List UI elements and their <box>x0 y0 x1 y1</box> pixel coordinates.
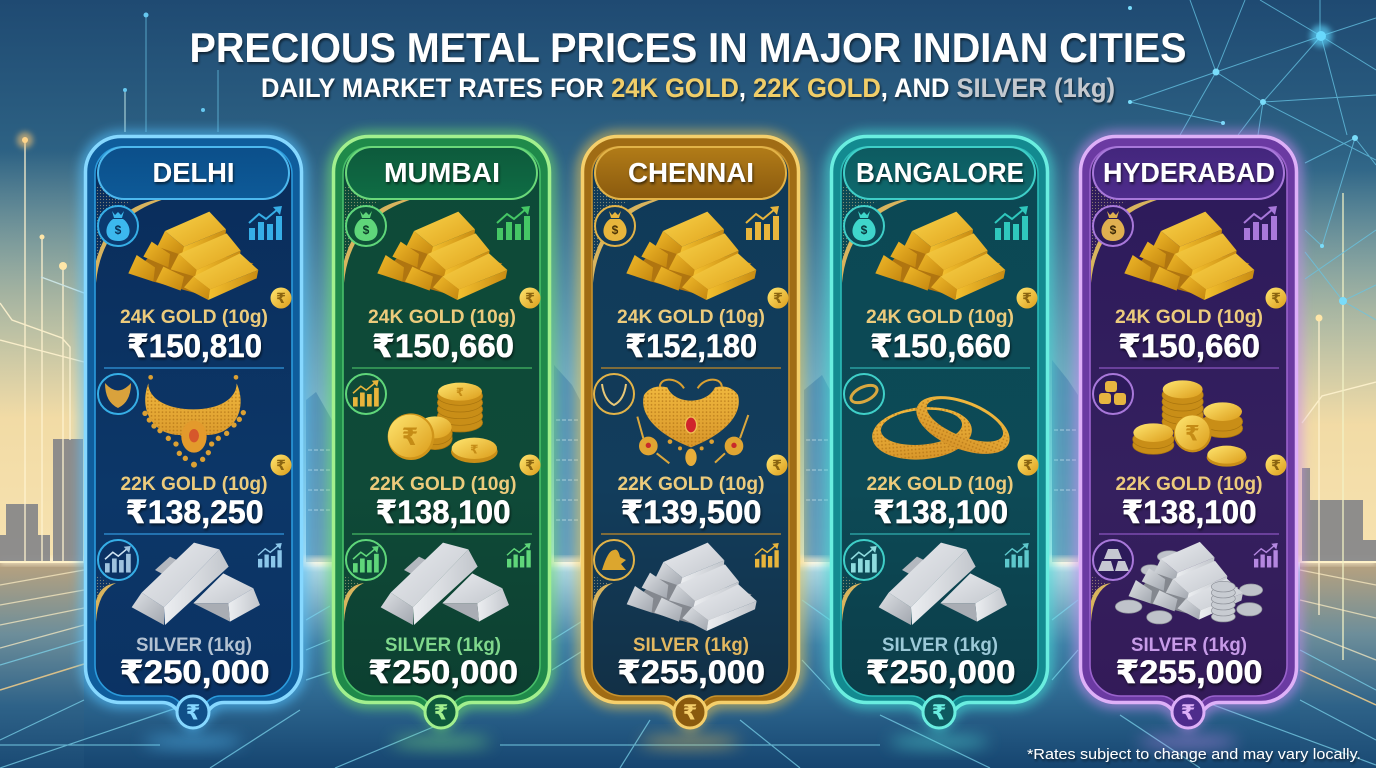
icon: money bag <box>346 206 386 246</box>
separators <box>104 368 284 534</box>
24K price: ₹150,660 <box>1118 328 1260 364</box>
city header: MUMBAI <box>384 157 500 188</box>
illustration: silver bars <box>879 543 1007 625</box>
icon: ring <box>844 374 884 414</box>
icon: money bag <box>98 206 138 246</box>
card: Delhi <box>86 136 302 728</box>
separators <box>352 368 532 534</box>
coin badge: ₹ <box>276 457 286 473</box>
coin badge: ₹ <box>772 457 782 473</box>
city header <box>346 147 537 199</box>
coin badge <box>766 454 788 476</box>
city header <box>98 147 289 199</box>
coin badge: ₹ <box>1271 290 1281 306</box>
coin badge <box>520 454 540 476</box>
gold arc decoration <box>842 187 914 622</box>
city header <box>844 147 1035 199</box>
illustration: coin stacks: ₹ <box>456 387 464 399</box>
24K label: 24K GOLD (10g) <box>1115 307 1263 328</box>
22K price: ₹138,250 <box>126 494 264 530</box>
24K label: 24K GOLD (10g) <box>866 307 1014 328</box>
coin badge <box>768 288 788 308</box>
icon: money bag: $ <box>363 223 370 237</box>
icon: small trend <box>258 543 282 567</box>
illustration: coin stacks: ₹ <box>1185 422 1200 446</box>
illustration: silver pile <box>627 543 757 631</box>
gold arc decoration <box>344 187 416 622</box>
silver price: ₹250,000 <box>866 654 1016 690</box>
icon: necklace <box>98 374 138 414</box>
24K label: 24K GOLD (10g) <box>617 307 765 328</box>
22K price: ₹139,500 <box>620 494 762 530</box>
card: Mumbai <box>334 136 550 728</box>
coin badge <box>520 288 540 308</box>
coin badge <box>270 454 292 476</box>
illustration: gold bars <box>1124 212 1254 300</box>
card frame <box>832 136 1048 726</box>
rupee medallion <box>1172 696 1204 728</box>
illustration: necklace <box>142 375 246 468</box>
silver label: SILVER (1kg) <box>136 635 252 656</box>
icon: silver bars <box>1093 540 1133 580</box>
silver price: ₹250,000 <box>120 654 270 690</box>
subtitle: DAILY MARKET RATES FOR 24K GOLD, 22K GOLD, AND SILVER (1kg) <box>261 73 1115 103</box>
icon: small trend <box>507 543 531 567</box>
illustration: gold bars <box>875 212 1005 300</box>
city header: CHENNAI <box>628 157 754 188</box>
icon: money bag <box>595 206 635 246</box>
icon: trend circle <box>844 540 884 580</box>
card: Bangalore <box>832 136 1048 728</box>
silver label: SILVER (1kg) <box>633 635 749 656</box>
24K label: 24K GOLD (10g) <box>368 307 516 328</box>
card frame <box>86 136 302 726</box>
22K label: 22K GOLD (10g) <box>120 474 268 495</box>
24K price: ₹152,180 <box>625 328 757 364</box>
icon: small trend <box>1254 543 1278 567</box>
coin badge: ₹ <box>525 290 535 306</box>
illustration: coin stacks <box>388 383 498 463</box>
icon: gold emblem <box>594 540 634 580</box>
illustration: necklace and earrings <box>637 380 748 466</box>
coin badge: ₹ <box>525 457 535 473</box>
coin badge <box>1018 454 1038 476</box>
coin badge: ₹ <box>773 290 783 306</box>
coin badge: ₹ <box>1022 290 1032 306</box>
icon: trend <box>497 206 530 240</box>
rupee medallion: ₹ <box>434 702 448 724</box>
icon: trend <box>249 206 282 240</box>
card frame <box>334 136 550 726</box>
title: PRECIOUS METAL PRICES IN MAJOR INDIAN CITIES <box>190 24 1186 71</box>
illustration: gold rings <box>870 384 1018 466</box>
22K price: ₹138,100 <box>1122 494 1256 530</box>
footnote: *Rates subject to change and may vary locally. <box>1027 746 1361 763</box>
icon: trend circle <box>98 540 138 580</box>
silver label: SILVER (1kg) <box>385 635 501 656</box>
illustration: silver bars <box>381 543 509 625</box>
icon: small trend <box>755 543 779 567</box>
icon: necklace outline <box>594 374 634 414</box>
illustration: silver bars <box>132 543 260 625</box>
illustration: gold bars <box>377 212 507 300</box>
icon: trend <box>1244 206 1277 240</box>
icon: money bag: $ <box>115 223 122 237</box>
silver price: ₹250,000 <box>368 654 518 690</box>
22K label: 22K GOLD (10g) <box>866 474 1014 495</box>
coin badge <box>1266 454 1286 476</box>
card: Chennai <box>582 136 798 728</box>
illustration: coin stacks <box>1133 380 1247 467</box>
coin badge: ₹ <box>1023 457 1033 473</box>
rupee medallion: ₹ <box>683 702 697 724</box>
rupee medallion <box>425 696 457 728</box>
separators <box>601 368 781 534</box>
22K label: 22K GOLD (10g) <box>370 474 516 495</box>
22K label: 22K GOLD (10g) <box>1116 474 1262 495</box>
24K label: 24K GOLD (10g) <box>120 307 268 328</box>
24K price: ₹150,810 <box>127 328 262 364</box>
24K price: ₹150,660 <box>372 328 514 364</box>
rupee medallion <box>177 696 209 728</box>
silver label: SILVER (1kg) <box>882 635 998 656</box>
icon: money bag: $ <box>1110 223 1117 237</box>
card frame <box>1080 136 1296 726</box>
coin badge: ₹ <box>276 290 286 306</box>
icon: money bag: $ <box>861 223 868 237</box>
gold arc decoration <box>1091 187 1163 622</box>
illustration: coin stacks: ₹ <box>470 442 478 456</box>
card: Hyderabad <box>1080 136 1296 728</box>
silver price: ₹255,000 <box>617 654 765 690</box>
city header <box>595 147 786 199</box>
22K price: ₹138,100 <box>873 494 1008 530</box>
rupee medallion: ₹ <box>186 702 200 724</box>
icon: trend <box>995 206 1028 240</box>
icon: trend circle <box>346 374 386 414</box>
icon: money bag <box>844 206 884 246</box>
illustration: gold bars <box>626 212 756 300</box>
city header: DELHI <box>152 157 234 188</box>
separators <box>850 368 1030 534</box>
city header <box>1093 147 1284 199</box>
coin badge: ₹ <box>1271 457 1281 473</box>
22K price: ₹138,100 <box>376 494 510 530</box>
card frame <box>582 136 798 726</box>
icon: small trend <box>1005 543 1029 567</box>
coin badge <box>270 288 292 308</box>
rupee medallion: ₹ <box>1181 702 1195 724</box>
separators <box>1099 368 1279 534</box>
icon: coin stacks <box>1093 374 1133 414</box>
illustration: gold bars <box>128 212 258 300</box>
icon: money bag <box>1093 206 1133 246</box>
icon: trend circle <box>346 540 386 580</box>
city header: HYDERABAD <box>1103 157 1275 188</box>
illustration: silver coins and bars <box>1115 542 1263 624</box>
rupee medallion: ₹ <box>932 702 946 724</box>
illustration: coin stacks: ₹ <box>402 424 418 451</box>
coin badge <box>1266 288 1286 308</box>
silver price: ₹255,000 <box>1116 654 1262 690</box>
city header: BANGALORE <box>856 157 1024 188</box>
24K price: ₹150,660 <box>870 328 1011 364</box>
coin badge <box>1016 288 1038 308</box>
gold arc decoration <box>96 187 168 622</box>
rupee medallion <box>923 696 955 728</box>
22K label: 22K GOLD (10g) <box>618 474 764 495</box>
icon: money bag: $ <box>612 223 619 237</box>
silver label: SILVER (1kg) <box>1131 635 1247 656</box>
icon: trend <box>746 206 779 240</box>
rupee medallion <box>674 696 706 728</box>
gold arc decoration <box>593 187 665 622</box>
